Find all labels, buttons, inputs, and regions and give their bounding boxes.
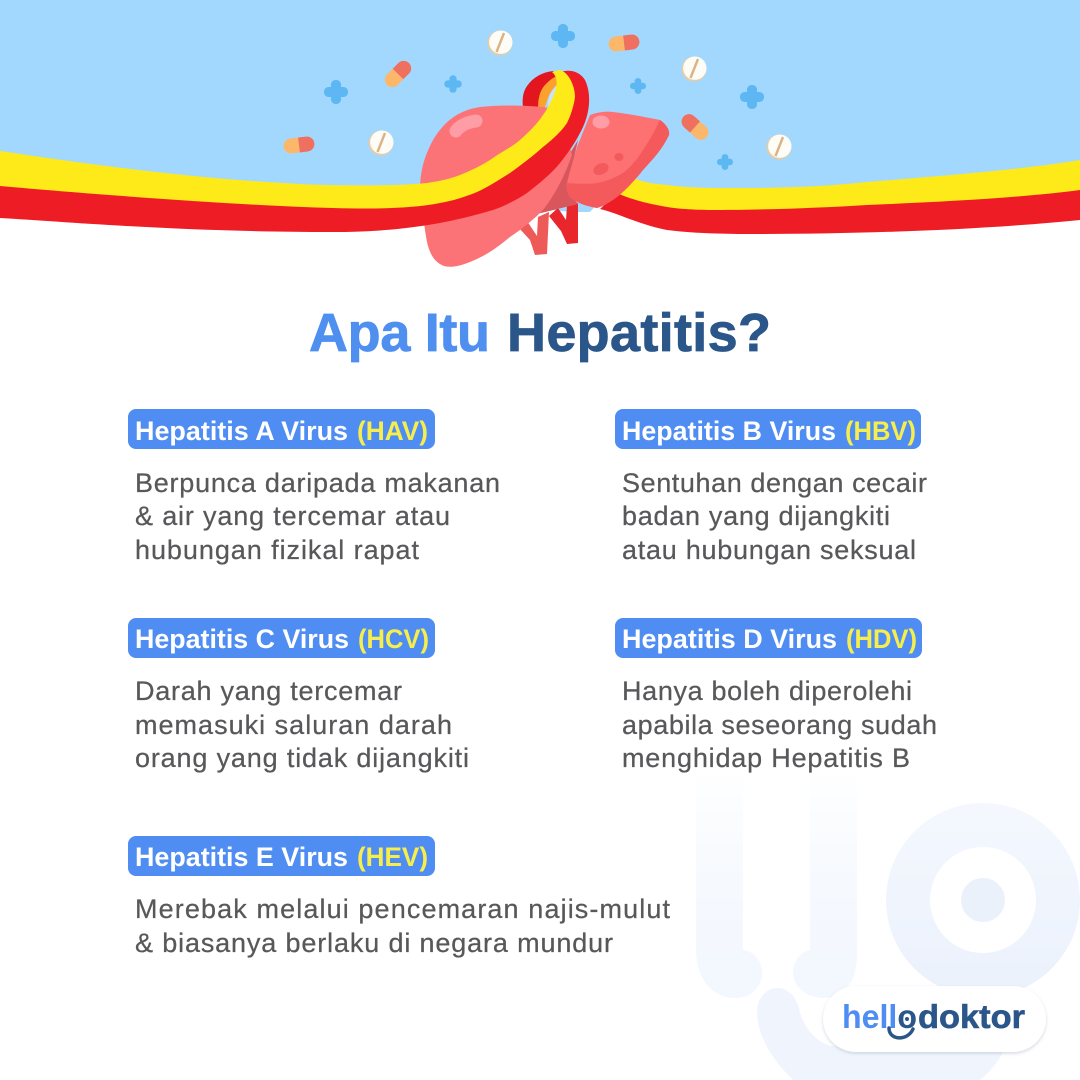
logo: hellodoktor: doktor: [918, 998, 1025, 1035]
liver centre shadow: [525, 140, 578, 226]
panel: Hepatitis E: [128, 836, 670, 958]
text: HEV description: [135, 894, 670, 958]
ribbon: right band: [600, 160, 1080, 234]
ribbon: left band wrapping liver: [0, 70, 589, 232]
text: HBV description: atau hubungan seksual: [622, 535, 916, 565]
logo: hellodoktor: hello: [842, 998, 917, 1035]
text: HAV description: & air yang tercemar atau: [135, 501, 450, 531]
right lobe: [567, 112, 669, 208]
right lobe shade: [567, 120, 669, 208]
tag: HEV: [128, 836, 435, 876]
panel: Hepatitis D: [615, 618, 937, 773]
tag: HDV: (HDV): [846, 624, 917, 654]
vessels: [519, 203, 578, 255]
text: HAV description: [135, 468, 500, 565]
tag: HBV: Hepatitis B Virus: [622, 416, 836, 446]
highlights: [456, 121, 476, 131]
text: HAV description: hubungan fizikal rapat: [135, 535, 419, 565]
panel: Hepatitis B: [615, 409, 927, 565]
tag: HCV: (HCV): [358, 624, 429, 654]
panel: Hepatitis C: [128, 618, 469, 773]
tag: HEV: Hepatitis E Virus: [135, 842, 348, 872]
text: HEV description: Merebak melalui pencemaran najis-mulut: [135, 894, 670, 924]
tag: HEV: (HEV): [357, 842, 428, 872]
text: HCV description: memasuki saluran darah: [135, 710, 452, 740]
text: HBV description: Sentuhan dengan cecair: [622, 468, 927, 498]
title: [309, 303, 771, 363]
tag: HCV: Hepatitis C Virus: [135, 624, 349, 654]
logo: hellodoktor: [823, 986, 1046, 1052]
tag: HDV: Hepatitis D Virus: [622, 624, 837, 654]
text: HCV description: [135, 676, 469, 773]
tag: HAV: Hepatitis A Virus: [135, 416, 348, 446]
left lobe: [420, 106, 572, 267]
text: HDV description: Hanya boleh diperolehi: [622, 676, 912, 706]
illustration: floating medical icons: [283, 24, 792, 170]
text: HBV description: badan yang dijangkiti: [622, 501, 890, 531]
tag: HBV: [615, 409, 921, 449]
text: HBV description: [622, 468, 927, 565]
panel: Hepatitis A: [128, 409, 500, 565]
illustration: ribbon loop behind liver: [523, 71, 562, 110]
text: HAV description: Berpunca daripada makanan: [135, 468, 500, 498]
tag: HBV: (HBV): [845, 416, 916, 446]
tag: HAV: [128, 409, 435, 449]
text: HDV description: [622, 676, 937, 773]
tag: HDV: [615, 618, 922, 658]
text: HDV description: menghidap Hepatitis B: [622, 743, 910, 773]
text: HCV description: Darah yang tercemar: [135, 676, 402, 706]
background: sky: [0, 0, 1080, 212]
text: HDV description: apabila seseorang sudah: [622, 710, 937, 740]
title: Hepatitis?: [507, 303, 771, 363]
illustration: liver: [420, 106, 669, 267]
title: Apa Itu: [309, 303, 490, 363]
tag: HCV: [128, 618, 435, 658]
watermark: stethoscope: [696, 770, 1080, 1080]
text: HEV description: & biasanya berlaku di negara mundur: [135, 928, 613, 958]
tag: HAV: (HAV): [357, 416, 428, 446]
text: HCV description: orang yang tidak dijangkiti: [135, 743, 469, 773]
